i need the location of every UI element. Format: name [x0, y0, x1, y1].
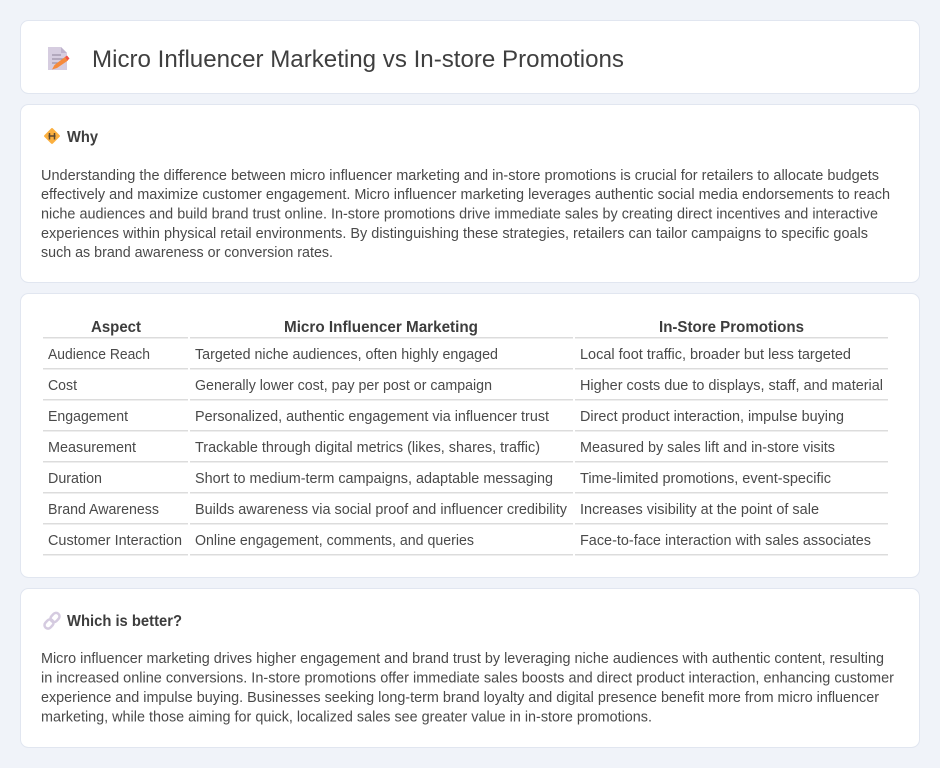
- text block: which is better paragraph: marketing, while those aiming for quick, localized sales see greater value in in-store promotions.: [41, 710, 652, 726]
- heading: which is better: Which is better?: [67, 613, 182, 630]
- icon: memo with pencil: [48, 47, 70, 70]
- table row: measurement: Measurement: [48, 440, 136, 456]
- table row: engagement: Direct product interaction, impulse buying: [580, 409, 844, 425]
- text block: which is better paragraph: in increased online conversions. In-store promotions offer immediate sales boosts and direct product interaction, enhancing customer: [41, 670, 894, 686]
- table header row: Aspect: [91, 319, 142, 336]
- panel: which is better: [20, 588, 920, 748]
- text block: why paragraph: [41, 168, 890, 261]
- panel: comparison table: [20, 294, 920, 578]
- table row: customer interaction: Customer Interaction: [48, 533, 182, 549]
- table row: engagement: Personalized, authentic engagement via influencer trust: [195, 409, 549, 425]
- table row: customer interaction: Face-to-face interaction with sales associates: [580, 533, 871, 549]
- table header row: [43, 319, 888, 338]
- text block: why paragraph: experiences within physical retail environments. By distinguishing these strategies, retailers can tailor campaigns to specific goals: [41, 226, 868, 242]
- table row: measurement: Trackable through digital metrics (likes, shares, traffic): [195, 440, 540, 456]
- table row: brand awareness: Brand Awareness: [48, 502, 159, 518]
- table row: cost: Higher costs due to displays, staff, and material: [580, 378, 883, 394]
- table header row: Micro Influencer Marketing: [284, 319, 478, 336]
- table row: customer interaction: [43, 533, 888, 556]
- title: Micro Influencer Marketing vs In-store Promotions: [92, 46, 624, 73]
- table row: audience reach: Local foot traffic, broader but less targeted: [580, 347, 851, 363]
- table row: cost: Cost: [48, 378, 77, 394]
- text block: why paragraph: effectively and maximize customer engagement. Micro influencer marketing leverages authentic social media endorsements to reach: [41, 187, 890, 203]
- table row: audience reach: Audience Reach: [48, 347, 150, 363]
- panel: why: [20, 104, 920, 282]
- text block: which is better paragraph: experience and impulse buying. Businesses seeking long-term brand loyalty and digital presence benefit more from micro influencer: [41, 690, 879, 706]
- table row: brand awareness: Builds awareness via social proof and influencer credibility: [195, 502, 568, 518]
- table row: measurement: Measured by sales lift and in-store visits: [580, 440, 835, 456]
- text block: which is better paragraph: Micro influencer marketing drives higher engagement and brand trust by leveraging niche audiences with authentic content, resulting: [41, 651, 884, 667]
- text block: which is better paragraph: [41, 651, 894, 726]
- table row: duration: Short to medium-term campaigns, adaptable messaging: [195, 471, 553, 487]
- table row: audience reach: Targeted niche audiences, often highly engaged: [195, 347, 498, 363]
- table row: duration: Duration: [48, 471, 102, 487]
- table row: engagement: [43, 409, 888, 432]
- table row: duration: [43, 471, 888, 494]
- table row: duration: Time-limited promotions, event-specific: [580, 471, 831, 487]
- heading: why: Why: [67, 129, 98, 146]
- table row: customer interaction: Online engagement, comments, and queries: [195, 533, 474, 549]
- table row: brand awareness: [43, 502, 888, 524]
- table row: measurement: [43, 440, 888, 462]
- table row: audience reach: [43, 347, 888, 370]
- table row: cost: [43, 378, 888, 400]
- table row: brand awareness: Increases visibility at the point of sale: [580, 502, 819, 518]
- text block: why paragraph: Understanding the difference between micro influencer marketing and in-store promotions is crucial for retailers to allocate budgets: [41, 168, 879, 184]
- text block: why paragraph: niche audiences and build brand trust online. In-store promotions drive immediate sales by creating direct incentives and interactive: [41, 206, 878, 222]
- icon: link: [43, 611, 61, 630]
- panel: title header: [20, 20, 920, 94]
- text block: why paragraph: such as brand awareness or conversion rates.: [41, 245, 333, 261]
- table row: cost: Generally lower cost, pay per post or campaign: [195, 378, 492, 394]
- icon: children crossing diamond: [44, 128, 60, 144]
- table row: engagement: Engagement: [48, 409, 128, 425]
- table header row: In-Store Promotions: [659, 319, 804, 336]
